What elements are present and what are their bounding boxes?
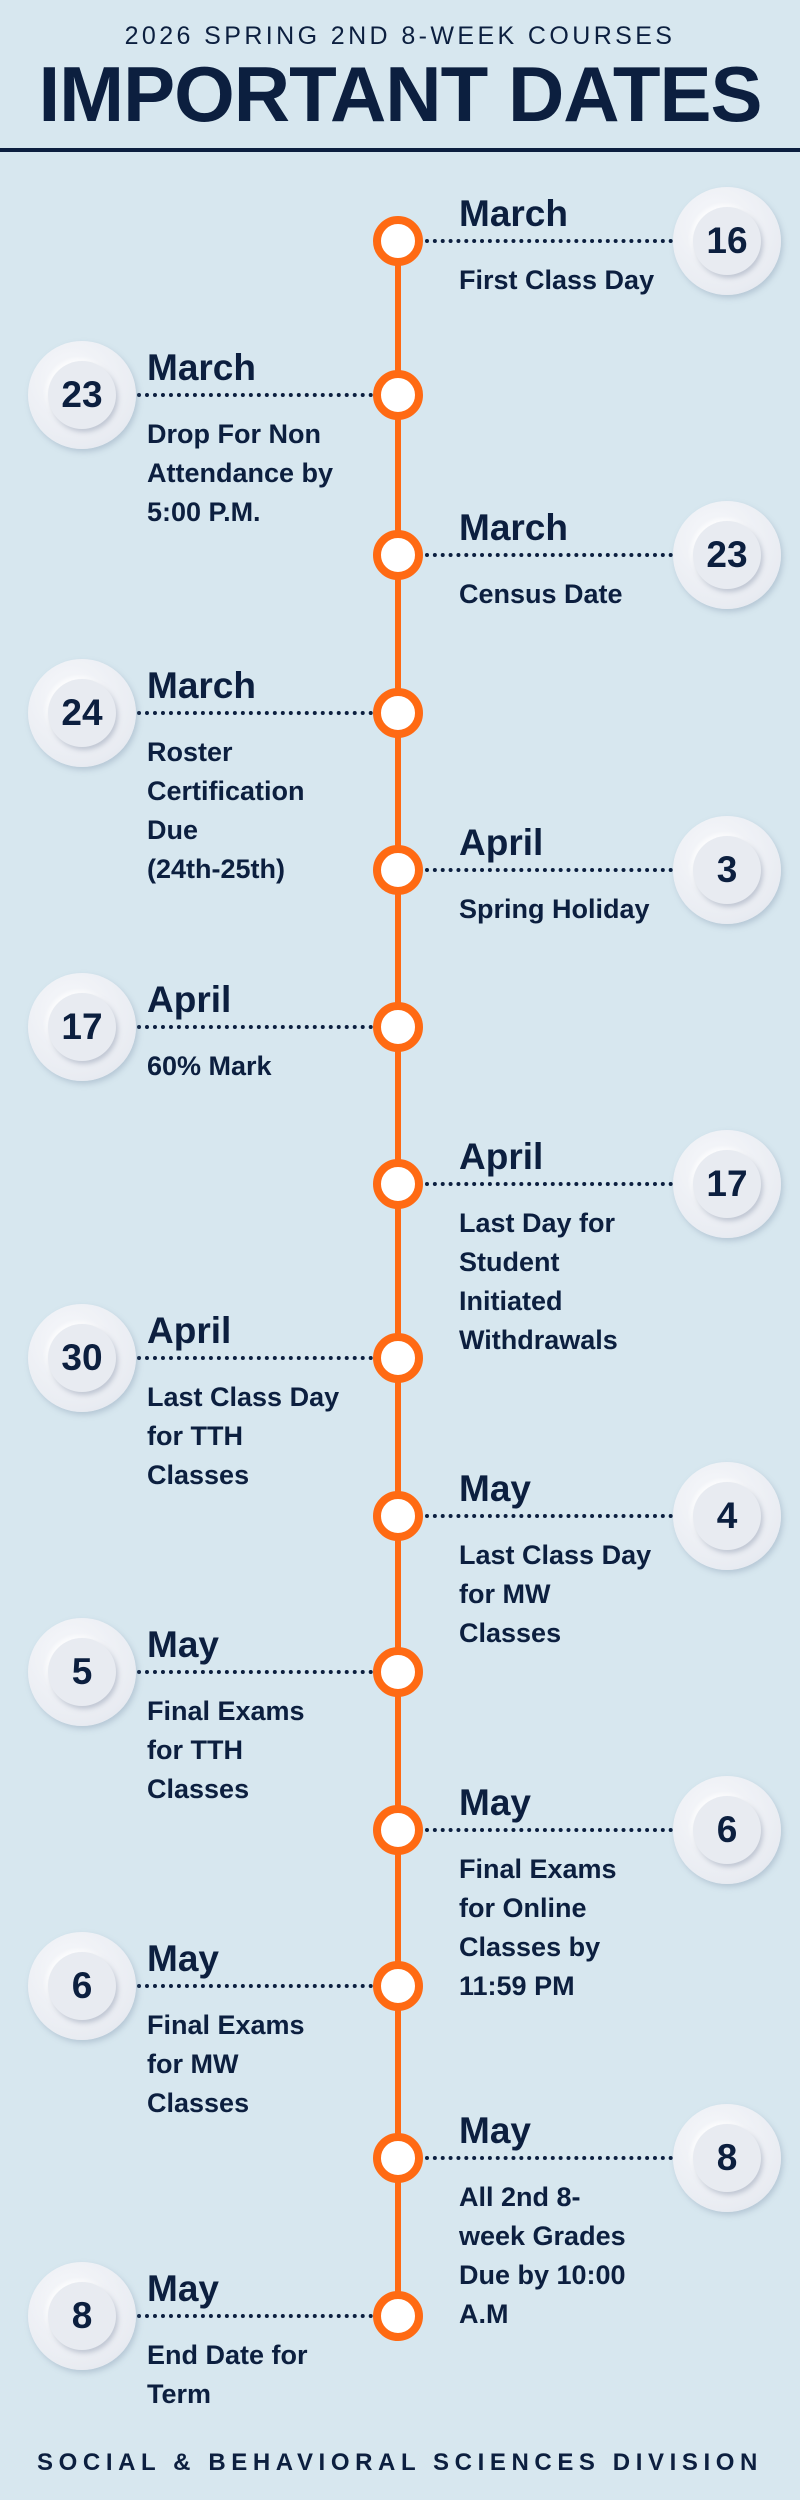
- event: April 30: 30: [61, 1337, 103, 1378]
- event: April 17 60%: 17: [61, 1006, 103, 1047]
- event: May 8 grades: 8: [717, 2137, 737, 2178]
- event: March 24 roster: 24: [61, 692, 103, 733]
- event: April 17 withdrawals: 17: [706, 1163, 748, 1204]
- event: May 5: [28, 1618, 423, 1804]
- event: March 23 drop: 23: [61, 374, 103, 415]
- text: Classes: [147, 1460, 249, 1490]
- event: March 16: 16: [706, 220, 748, 261]
- event: March 24 roster: Roster: [147, 737, 233, 767]
- event: March 16: [373, 187, 785, 300]
- event: April 3: April: [459, 822, 543, 863]
- event: March 23 census: Census Date: [459, 579, 623, 609]
- event: May 4: 4: [717, 1495, 737, 1536]
- text: A.M: [459, 2299, 508, 2329]
- timeline spine: [395, 241, 401, 2316]
- event: May 5: May: [147, 1624, 219, 1665]
- text: for MW: [459, 1579, 550, 1609]
- text: week Grades: [459, 2221, 626, 2251]
- event: March 23 census: 23: [706, 534, 748, 575]
- event: May 8 end: [28, 2262, 423, 2409]
- event: May 8 end: 8: [72, 2295, 92, 2336]
- text: Attendance by: [147, 458, 333, 488]
- text: Initiated: [459, 1286, 563, 1316]
- event: April 30: April: [147, 1310, 231, 1351]
- event: March 16: March: [459, 193, 568, 234]
- event: May 8 grades: All 2nd 8-: [459, 2182, 581, 2212]
- event: March 24 roster: [28, 659, 778, 2341]
- event: April 17 withdrawals: Last Day for: [459, 1208, 615, 1238]
- text: Withdrawals: [459, 1325, 618, 1355]
- event: May 4: [373, 1462, 785, 1648]
- event: April 30: Last Class Day: [147, 1382, 339, 1412]
- event: May 4: May: [459, 1468, 531, 1509]
- event: April 3: [373, 816, 785, 929]
- event: April 30: [28, 1304, 423, 1490]
- event: May 8 end: End Date for: [147, 2340, 308, 2370]
- event: May 6 online: Final Exams: [459, 1854, 617, 1884]
- event: May 6 MW: May: [147, 1938, 219, 1979]
- event: May 8 grades: May: [459, 2110, 531, 2151]
- event: March 24 roster: March: [147, 665, 256, 706]
- text: 11:59 PM: [459, 1971, 575, 2001]
- event: March 23 drop: [28, 341, 423, 527]
- event: March 23 census: [373, 501, 785, 614]
- event: May 8 end: May: [147, 2268, 219, 2309]
- text: (24th-25th): [147, 854, 285, 884]
- text: Certification: [147, 776, 305, 806]
- event: March 23 census: March: [459, 507, 568, 548]
- text: Due: [147, 815, 198, 845]
- text: for Online: [459, 1893, 586, 1923]
- event: April 3: 3: [717, 849, 737, 890]
- event: April 3: Spring Holiday: [459, 894, 650, 924]
- text: Classes: [147, 2088, 249, 2118]
- event: April 17 60%: 60% Mark: [147, 1051, 272, 1081]
- subtitle: 2026 SPRING 2ND 8-WEEK COURSES: [125, 22, 675, 50]
- event: May 6 online: [373, 1776, 785, 2316]
- event: May 6 MW: Final Exams: [147, 2010, 305, 2040]
- event: May 5: 5: [72, 1651, 92, 1692]
- text: Student: [459, 1247, 560, 1277]
- title: IMPORTANT DATES: [38, 50, 762, 138]
- event: April 17 withdrawals: [138, 1130, 785, 2316]
- text: Term: [147, 2379, 211, 2409]
- text: for MW: [147, 2049, 238, 2079]
- text: 5:00 P.M.: [147, 497, 261, 527]
- event: May 6 MW: [28, 1932, 423, 2118]
- event: May 4: Last Class Day: [459, 1540, 651, 1570]
- event: March 16: First Class Day: [459, 265, 654, 295]
- text: Due by 10:00: [459, 2260, 626, 2290]
- event: May 6 online: May: [459, 1782, 531, 1823]
- event: March 23 drop: Drop For Non: [147, 419, 321, 449]
- event: April 17 60%: April: [147, 979, 231, 1020]
- event: April 17 withdrawals: April: [459, 1136, 543, 1177]
- text: Classes by: [459, 1932, 600, 1962]
- event: May 6 MW: 6: [72, 1965, 92, 2006]
- text: Classes: [459, 1618, 561, 1648]
- text: Classes: [147, 1774, 249, 1804]
- event: May 6 online: 6: [717, 1809, 737, 1850]
- text: for TTH: [147, 1421, 243, 1451]
- event: April 17 60%: [28, 973, 423, 1086]
- event: May 5: Final Exams: [147, 1696, 305, 1726]
- event: March 23 drop: March: [147, 347, 256, 388]
- footer: SOCIAL & BEHAVIORAL SCIENCES DIVISION: [37, 2449, 763, 2476]
- event: May 8 grades: [373, 2104, 785, 2329]
- text: for TTH: [147, 1735, 243, 1765]
